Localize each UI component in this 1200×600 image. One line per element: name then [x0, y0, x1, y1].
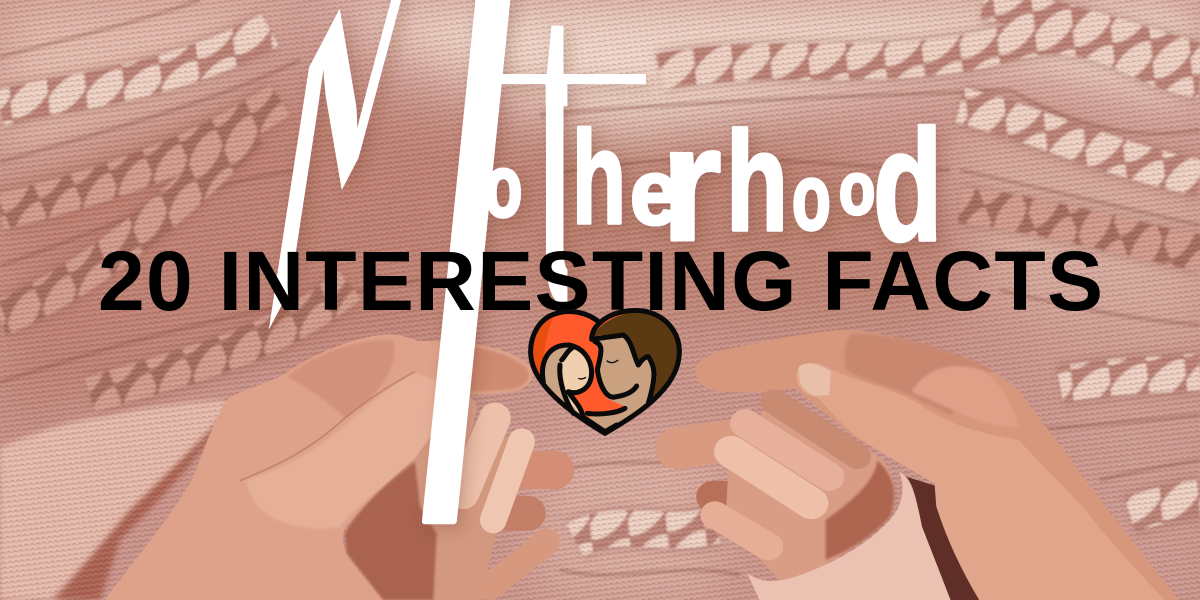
cuff: [747, 472, 951, 600]
heading: 20 interesting facts: 20 INTERESTING FACTS: [98, 234, 1103, 328]
title lettering: Motherhood: o: [839, 148, 875, 231]
title lettering: Motherhood: –: [489, 0, 645, 138]
icon: parent and child heart logo: [531, 311, 679, 433]
baby hand: [345, 413, 527, 600]
adult index finger and palm: [796, 363, 1165, 600]
adult hand: [105, 334, 533, 600]
left hands: adult and baby: [105, 334, 555, 600]
title lettering: Motherhood: —: [154, 0, 699, 521]
knit fold, lower left: [0, 400, 225, 600]
title lettering: Motherhood: [268, 0, 946, 535]
title lettering: Motherhood: e: [630, 141, 679, 245]
adult hand back: [695, 330, 1179, 600]
title lettering: Motherhood: h: [726, 104, 788, 261]
title lettering: Motherhood: r: [661, 91, 722, 275]
baby hand: [726, 397, 895, 580]
adult fingertips behind baby hand: [517, 412, 555, 527]
title lettering: Motherhood: o: [792, 145, 831, 249]
right hands: adult, baby and cuff: [677, 330, 1179, 600]
adult lower fingers: [677, 437, 754, 448]
title lettering: Motherhood: o: [484, 138, 522, 236]
title lettering: Motherhood: d: [873, 98, 942, 274]
title lettering: Motherhood: h: [572, 103, 626, 251]
